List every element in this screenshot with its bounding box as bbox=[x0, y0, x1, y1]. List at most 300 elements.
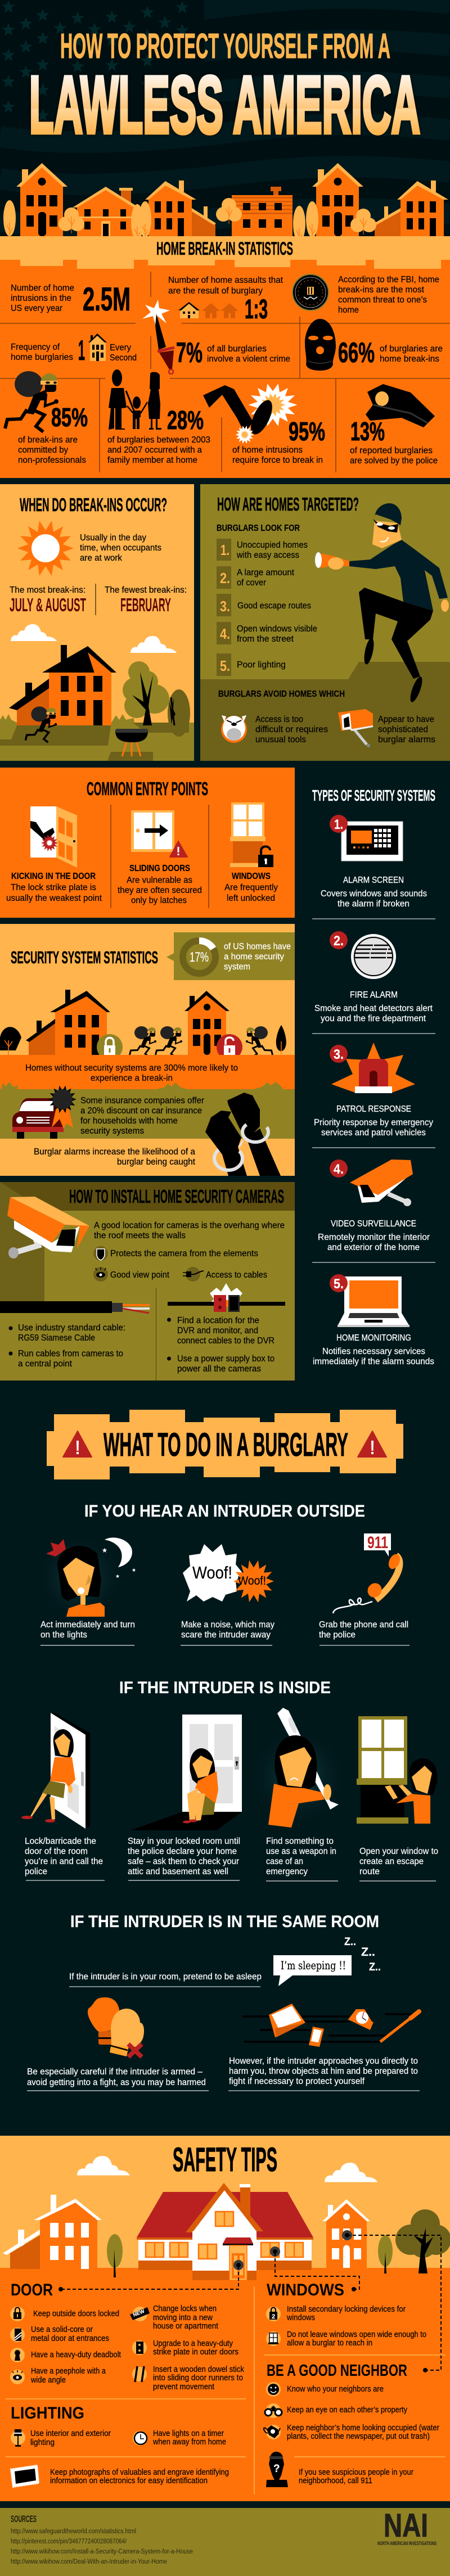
stat: force to break in bbox=[232, 417, 325, 465]
stat: home break-ins share: home break-ins bbox=[380, 354, 439, 364]
illustration: phone and 911 bubble: 911 bbox=[367, 1533, 388, 1552]
item: view point: Good view point bbox=[110, 1270, 170, 1280]
list: burglars look for: with easy access bbox=[236, 551, 299, 560]
list: burglars avoid homes: difficult or requires bbox=[255, 725, 328, 734]
band: homes without systems: experience a break-in bbox=[91, 1073, 173, 1083]
system 5: home monitoring: HOME MONITORING bbox=[336, 1333, 411, 1343]
illustration: woman holding bat bbox=[250, 1708, 346, 1828]
system 2: fire alarm: 2. bbox=[334, 933, 344, 949]
list: burglars look for: 4. bbox=[220, 625, 230, 642]
list: burglars look for: BURGLARS LOOK FOR bbox=[217, 524, 300, 533]
stat: non-professionals: non-professionals bbox=[18, 455, 86, 465]
list: burglars look for bbox=[217, 524, 317, 676]
stat: home break-ins share: of burglaries are bbox=[380, 344, 443, 354]
text: daytime bbox=[80, 533, 161, 563]
section: if you hear an intruder outside bbox=[38, 1502, 410, 1645]
system 4: video surveillance: 4. bbox=[334, 1162, 344, 1177]
system 2: fire alarm bbox=[314, 931, 433, 1023]
icon: binoculars bbox=[265, 2403, 282, 2418]
text: good location: the roof meets the walls bbox=[94, 1231, 186, 1240]
text: kicking in the door: KICKING IN THE DOOR bbox=[11, 872, 96, 881]
section: lighting tips: when away from home bbox=[152, 2438, 226, 2447]
system 1: alarm screen: 1. bbox=[334, 817, 343, 832]
list: left install steps: Use industry standard cable: bbox=[18, 1323, 125, 1333]
system 3: patrol response bbox=[314, 1043, 433, 1138]
text: find a weapon: emergency bbox=[266, 1867, 308, 1876]
icon: dowels bbox=[132, 2366, 147, 2382]
system 4: video surveillance: Remotely monitor the interior bbox=[318, 1233, 430, 1242]
text: throw objects: However, if the intruder approaches you directly to bbox=[229, 2056, 418, 2066]
panel: how to install home security cameras bbox=[0, 1182, 295, 1381]
text: lock or barricade: police bbox=[25, 1867, 47, 1876]
tip: photographs of valuables: Keep photographs of valuables and engrave identifying bbox=[50, 2468, 229, 2477]
heading band bbox=[0, 236, 450, 269]
text: sliding doors: only by latches bbox=[131, 896, 187, 905]
icon: smiley bbox=[266, 2382, 281, 2397]
illustration: woman turning on lights bbox=[38, 1535, 136, 1619]
stat: family member at home bbox=[107, 405, 210, 465]
sleeping zs: Z.. bbox=[361, 1946, 375, 1959]
illustration: row of orange houses bbox=[3, 163, 448, 252]
list: right install steps bbox=[167, 1316, 274, 1374]
system 3: patrol response: PATROL RESPONSE bbox=[336, 1104, 411, 1114]
source list bbox=[11, 2528, 193, 2565]
panel: when do break-ins occur bbox=[0, 484, 194, 761]
list: burglars avoid homes: unusual tools bbox=[255, 735, 306, 745]
section: windows tips: windows bbox=[286, 2313, 315, 2322]
text: lock or barricade: door of the room bbox=[25, 1847, 88, 1856]
text: lock or barricade: you’re in and call the bbox=[25, 1857, 103, 1866]
list: left install steps bbox=[9, 1323, 125, 1369]
stat: family member at home: and 2007 occurred with a bbox=[107, 445, 202, 455]
stat: home break-ins share: 66% bbox=[338, 337, 375, 368]
stat: solved by police: 13% bbox=[350, 417, 385, 446]
text: grab the phone: Grab the phone and call bbox=[319, 1620, 408, 1630]
section: door tips: into sliding door runners to bbox=[153, 2374, 243, 2383]
callout: 17 percent: 17% bbox=[190, 950, 209, 965]
stat: solved by police bbox=[350, 417, 438, 466]
illustration: large security camera bbox=[7, 1197, 89, 1258]
text: open window: route bbox=[359, 1867, 380, 1876]
heading: SECURITY SYSTEM STATISTICS bbox=[11, 948, 158, 967]
stat: home assaults ratio: Number of home assaults that bbox=[168, 276, 284, 285]
stat: non-professionals bbox=[18, 403, 88, 465]
illustration: woman sitting by door bbox=[130, 1715, 242, 1830]
system 4: video surveillance: and exterior of the home bbox=[327, 1243, 420, 1252]
stat: home intrusions per year bbox=[11, 281, 130, 318]
callout: 17 percent: a home security bbox=[224, 952, 284, 962]
stat: frequency of burglaries: home burglaries bbox=[11, 353, 73, 362]
clouds bbox=[77, 2156, 377, 2182]
list: right install steps: connect cables to the DVR bbox=[177, 1336, 274, 1346]
illustration: woman barricading door bbox=[21, 1713, 90, 1829]
callout: 17 percent: system bbox=[224, 962, 250, 972]
stat: home intrusions per year: intrusions in the bbox=[11, 294, 71, 303]
stat: non-professionals: 85% bbox=[51, 403, 88, 432]
source list: http://www.wikihow.com/Install-a-Security-Camera-System-for-a-House bbox=[11, 2548, 193, 2555]
list: right install steps: Find a location for the bbox=[177, 1316, 259, 1325]
logo: north american investigations: NAI bbox=[384, 2507, 428, 2544]
text: throw objects: harm you, throw objects at him and be prepared to bbox=[229, 2067, 418, 2076]
item: cables bbox=[183, 1267, 267, 1282]
stat: home assaults ratio bbox=[168, 276, 284, 324]
stat: frequency of burglaries bbox=[11, 333, 137, 366]
system 4: video surveillance bbox=[318, 1160, 430, 1252]
stat: family member at home: 28% bbox=[167, 405, 204, 435]
speech bubble bbox=[273, 1955, 352, 1986]
list: burglars avoid homes bbox=[218, 689, 435, 747]
icon: warning right bbox=[358, 1431, 386, 1457]
text: windows: WINDOWS bbox=[232, 872, 271, 881]
icon: lamp bbox=[11, 2429, 25, 2447]
system 5: home monitoring: 5. bbox=[334, 1276, 344, 1292]
icon: new tag: NEW bbox=[132, 2308, 146, 2318]
list: burglars look for: 5. bbox=[220, 657, 230, 674]
stat: non-professionals: committed by bbox=[18, 445, 68, 455]
text: peak and low months: The most break-ins: bbox=[10, 585, 86, 595]
stat: home break-ins share bbox=[338, 337, 443, 368]
text: stay in locked room: attic and basement as well bbox=[128, 1867, 228, 1876]
list: left install steps: a central point bbox=[18, 1359, 73, 1369]
panel: safety tips: SAFETY TIPS bbox=[173, 2141, 277, 2178]
tip: photographs of valuables: information on electronics for easy identification bbox=[50, 2476, 208, 2485]
icon: security camera bbox=[338, 709, 373, 747]
connector dashed lines bbox=[61, 2235, 441, 2370]
section: if the intruder is in the same room bbox=[27, 1912, 420, 2091]
text: careful if armed bbox=[27, 2067, 209, 2091]
section: door tips: moving into a new bbox=[153, 2313, 213, 2322]
section: be a good neighbor bbox=[264, 2362, 439, 2441]
text: stay in locked room: Stay in your locked room until bbox=[128, 1837, 240, 1846]
text: peak and low months: JULY & AUGUST bbox=[10, 594, 86, 615]
text: grab the phone: the police bbox=[319, 1630, 356, 1640]
panel: common entry points bbox=[0, 768, 295, 918]
section: door tips: Insert a wooden dowel stick bbox=[153, 2365, 245, 2374]
list: burglars look for: A large amount bbox=[237, 568, 295, 578]
illustration: main house with markers bbox=[137, 2183, 313, 2280]
speech bubble: I’m sleeping !! bbox=[281, 1959, 346, 1972]
icon: knife with flash bbox=[142, 300, 174, 374]
section: door tips: DOOR bbox=[11, 2281, 53, 2299]
section: lighting tips: Use interior and exterior bbox=[30, 2429, 111, 2438]
text: stay in locked room bbox=[128, 1837, 240, 1880]
panel: safety tips bbox=[0, 2136, 450, 2501]
stat: force to break in: require force to break in bbox=[232, 455, 323, 465]
text: act immediately: on the lights bbox=[40, 1630, 87, 1640]
text: stay in locked room: the police declare your home bbox=[128, 1847, 237, 1856]
illustration: woof speech bursts: Woof! bbox=[238, 1575, 266, 1587]
section: door tips: Have a heavy-duty deadbolt bbox=[31, 2351, 121, 2360]
illustration: siamese cable bbox=[0, 1301, 150, 1313]
illustration: woman opening window bbox=[357, 1716, 438, 1824]
icon: small window bbox=[266, 2331, 281, 2346]
section: door tips: Upgrade to a heavy-duty bbox=[153, 2339, 233, 2348]
text: daytime: Usually in the day bbox=[80, 533, 146, 543]
stat: violent crime: 7% bbox=[176, 337, 202, 368]
text: careful if armed: Be especially careful if the intruder is armed – bbox=[27, 2067, 202, 2077]
text: open window bbox=[359, 1847, 438, 1881]
illustration: right neighbouring house and trees bbox=[322, 2199, 450, 2273]
section: door tips: strike plate in outer doors bbox=[153, 2348, 238, 2357]
text: find a weapon: Find something to bbox=[266, 1837, 334, 1846]
section: be a good neighbor: Know who your neighbors are bbox=[287, 2385, 384, 2394]
text: lock or barricade: Lock/barricade the bbox=[25, 1837, 96, 1846]
text: find a weapon: case of an bbox=[266, 1857, 303, 1866]
text: peak and low months: FEBRUARY bbox=[120, 594, 171, 615]
heading: WHEN DO BREAK-INS OCCUR? bbox=[20, 494, 167, 515]
header flag background bbox=[0, 0, 450, 236]
source list: http://www.wikihow.com/Deal-With-an-Intruder-in-Your-Home bbox=[11, 2559, 167, 2565]
panel: types of security systems bbox=[312, 787, 435, 1366]
section: lighting tips: LIGHTING bbox=[11, 2404, 84, 2422]
text: windows bbox=[224, 872, 278, 903]
text: daytime: are at work bbox=[80, 553, 122, 563]
stat: FBI seal and text: home bbox=[338, 305, 359, 315]
system 1: alarm screen: ALARM SCREEN bbox=[343, 876, 404, 885]
stat: home assaults ratio: 1:3 bbox=[245, 295, 268, 324]
icon: warning left bbox=[63, 1431, 92, 1457]
list: left install steps: RG59 Siamese Cable bbox=[18, 1333, 95, 1343]
list: burglars look for: 1. bbox=[220, 542, 230, 558]
text: sliding doors: they are often secured bbox=[118, 886, 202, 895]
text: careful if armed: avoid getting into a fight, as you may be harmed bbox=[27, 2078, 206, 2087]
list: burglars avoid homes: burglar alarms bbox=[378, 735, 435, 745]
section: door tips: house or apartment bbox=[153, 2322, 218, 2331]
icon: kicked door bbox=[30, 806, 77, 868]
band: alarms and burglars caught: Burglar alarms increase the likelihood of a bbox=[34, 1147, 195, 1157]
section: if the intruder is inside bbox=[21, 1679, 438, 1881]
icon: strike plate bbox=[132, 2340, 147, 2355]
section: windows tips: WINDOWS bbox=[267, 2281, 344, 2299]
icon: peephole bbox=[10, 2370, 25, 2384]
text: sliding doors: SLIDING DOORS bbox=[129, 864, 190, 873]
callout: 17 percent: of US homes have bbox=[224, 942, 291, 951]
section: door tips: metal door at entrances bbox=[31, 2334, 109, 2343]
icon: watering can bbox=[264, 2425, 281, 2439]
item: shield bbox=[93, 1246, 258, 1261]
heading band: HOME BREAK-IN STATISTICS bbox=[156, 238, 293, 259]
band: insurance discount: security systems bbox=[80, 1126, 144, 1136]
text: make a noise bbox=[181, 1620, 274, 1645]
illustration: thrown objects bbox=[242, 2004, 419, 2047]
system 3: patrol response: services and patrol vehicles bbox=[321, 1128, 426, 1138]
heading: SOURCES bbox=[11, 2514, 37, 2524]
stat: violent crime: of all burglaries bbox=[207, 344, 267, 354]
section: door tips: Keep outside doors locked bbox=[33, 2309, 119, 2318]
illustration: woof speech bursts bbox=[183, 1544, 274, 1602]
list: burglars look for: from the street bbox=[237, 634, 294, 644]
icon: sliding door with warning bbox=[131, 810, 187, 857]
section: windows tips bbox=[266, 2281, 426, 2348]
list: burglars avoid homes: BURGLARS AVOID HOMES WHICH bbox=[218, 689, 345, 699]
band: insurance discount: for households with home bbox=[80, 1116, 178, 1126]
illustration: burglar with flashlight bbox=[315, 503, 449, 703]
text: peak and low months: The fewest break-ins: bbox=[105, 585, 187, 595]
system 5: home monitoring: immediately if the alarm sounds bbox=[313, 1357, 434, 1366]
text: windows: left unlocked bbox=[227, 894, 275, 903]
section: windows tips: allow a burglar to reach in bbox=[287, 2339, 372, 2348]
stat: FBI seal and text: common threat to one’s bbox=[338, 295, 427, 305]
stat: home assaults ratio: are the result of burglary bbox=[168, 286, 263, 296]
stat: FBI seal and text: According to the FBI, home bbox=[338, 275, 439, 285]
system 3: patrol response: 3. bbox=[334, 1047, 344, 1062]
stat: solved by police: are solved by the police bbox=[350, 456, 438, 466]
sleeping zs bbox=[344, 1936, 381, 1973]
tip: suspicious people: neighborhood, call 911 bbox=[299, 2476, 372, 2485]
system 2: fire alarm: FIRE ALARM bbox=[350, 990, 398, 1000]
stat: family member at home: family member at home bbox=[107, 455, 197, 465]
icon: clock bbox=[133, 2431, 147, 2446]
stat: FBI seal and text: break-ins are the most bbox=[338, 285, 425, 295]
callout: 17 percent bbox=[166, 932, 295, 980]
icon: police hat bbox=[366, 384, 435, 427]
text: grab the phone bbox=[319, 1620, 410, 1645]
stat: home intrusions per year: 2.5M bbox=[83, 281, 130, 318]
list: burglars avoid homes: sophisticated bbox=[378, 725, 428, 734]
text: open window: Open your window to bbox=[359, 1847, 438, 1856]
icon: unlocked badge bbox=[217, 1034, 242, 1060]
text: make a noise: scare the intruder away bbox=[181, 1630, 271, 1640]
text: make a noise: Make a noise, which may bbox=[181, 1620, 274, 1630]
text: lock or barricade bbox=[25, 1837, 105, 1880]
list: burglars look for: of cover bbox=[237, 578, 266, 588]
list: burglars look for: 3. bbox=[220, 598, 230, 615]
list: burglars avoid homes: Access is too bbox=[255, 715, 303, 724]
text: act immediately bbox=[40, 1620, 135, 1645]
sleeping zs: Z.. bbox=[344, 1936, 356, 1948]
system 1: alarm screen bbox=[321, 815, 427, 909]
panel: how are homes targeted bbox=[200, 484, 450, 761]
section: door tips: Change locks when bbox=[153, 2304, 217, 2313]
band: insurance discount bbox=[0, 1082, 295, 1139]
icon: boxing gloves bbox=[88, 1997, 144, 2057]
system 3: patrol response: Priority response by emergency bbox=[314, 1118, 433, 1127]
section: door tips: wide angle bbox=[30, 2376, 66, 2385]
icon: suspicious person: ? bbox=[273, 2463, 280, 2475]
illustration: woof speech bursts: Woof! bbox=[192, 1563, 232, 1582]
system 5: home monitoring bbox=[313, 1274, 434, 1366]
section: windows tips: Do not leave windows open wide enough to bbox=[287, 2330, 426, 2339]
section: windows tips: Install secondary locking devices for bbox=[287, 2305, 406, 2314]
text: kicking in the door bbox=[6, 872, 102, 903]
list: right install steps: Use a power supply box to bbox=[177, 1354, 274, 1364]
stat: frequency of burglaries: Every bbox=[110, 343, 131, 353]
item: view point bbox=[93, 1267, 170, 1282]
list: burglars look for: Open windows visible bbox=[237, 624, 317, 634]
tip: suspicious people: If you see suspicious people in your bbox=[299, 2468, 413, 2477]
panel: home break-in statistics bbox=[0, 236, 450, 478]
stat: FBI seal and text bbox=[292, 274, 439, 315]
stat: frequency of burglaries: 1 bbox=[78, 335, 85, 366]
stat: home intrusions per year: Number of home bbox=[11, 283, 74, 293]
text: sliding doors bbox=[118, 864, 202, 905]
text: good location bbox=[94, 1221, 285, 1240]
illustration: handcuffed hands bbox=[205, 1093, 281, 1176]
icon: balaclava mask bbox=[305, 319, 336, 371]
illustration: phone and 911 bubble bbox=[333, 1533, 402, 1613]
stat: home intrusions per year: US every year bbox=[11, 304, 62, 313]
icon: car with ribbon bbox=[12, 1085, 76, 1139]
band: insurance discount: Some insurance companies offer bbox=[80, 1096, 204, 1106]
stat: frequency of burglaries: Frequency of bbox=[11, 342, 60, 352]
system 1: alarm screen: Covers windows and sounds bbox=[321, 889, 427, 899]
stat: violent crime: involve a violent crime bbox=[207, 354, 290, 364]
section: door tips: prevent movement bbox=[153, 2383, 214, 2392]
icon: double lock: 2 bbox=[272, 2313, 275, 2320]
list: right install steps: DVR and monitor, and bbox=[177, 1326, 258, 1336]
illustration: house with burglar bbox=[0, 624, 194, 761]
list: burglars look for: Poor lighting bbox=[237, 660, 286, 670]
section: lighting tips: Have lights on a timer bbox=[153, 2429, 224, 2438]
system 5: home monitoring: Notifies necessary services bbox=[322, 1347, 425, 1356]
heading: IF THE INTRUDER IS IN THE SAME ROOM bbox=[70, 1912, 379, 1931]
source list: http://www.safeguardtheworld.com/statistics.html bbox=[11, 2528, 136, 2535]
stat: force to break in: of home intrusions bbox=[232, 445, 303, 455]
icon: padlock bbox=[10, 2307, 25, 2321]
stat: non-professionals: of break-ins are bbox=[18, 435, 78, 445]
illustration: left neighbouring house bbox=[3, 2195, 123, 2277]
icon: new tag bbox=[130, 2307, 150, 2321]
icon: burglar with sack bbox=[5, 371, 58, 432]
banner: what to do in a burglary bbox=[47, 1410, 403, 1479]
text: peak and low months bbox=[10, 584, 187, 615]
section: be a good neighbor: Keep an eye on each other’s property bbox=[287, 2406, 408, 2415]
tip: photographs of valuables bbox=[11, 2465, 229, 2487]
text: good location: A good location for cameras is the overhang where bbox=[94, 1221, 285, 1230]
source list: http://pinterest.com/pin/346777240028087064/ bbox=[11, 2538, 127, 2545]
text: find a weapon: use as a weapon in bbox=[266, 1847, 336, 1856]
section: door tips: Have a peephole with a bbox=[31, 2367, 106, 2376]
section: lighting tips bbox=[11, 2404, 226, 2447]
heading: IF YOU HEAR AN INTRUDER OUTSIDE bbox=[84, 1502, 365, 1521]
list: burglars avoid homes: Appear to have bbox=[378, 715, 434, 724]
system 1: alarm screen: the alarm if broken bbox=[338, 899, 410, 909]
stat: violent crime bbox=[176, 337, 290, 368]
text: kicking in the door: usually the weakest point bbox=[6, 894, 102, 903]
system 4: video surveillance: VIDEO SURVEILLANCE bbox=[331, 1219, 416, 1229]
band: insurance discount: a 20% discount on car insurance bbox=[80, 1106, 202, 1116]
stat: solved by police: of reported burglaries bbox=[350, 446, 433, 455]
text: windows: Are frequently bbox=[224, 883, 278, 892]
icon: locked badge bbox=[97, 1034, 123, 1060]
icon: suspicious person bbox=[266, 2452, 288, 2487]
icon: boot kicking with explosion bbox=[203, 384, 297, 444]
section: door tips bbox=[10, 2281, 245, 2392]
section: lighting tips: lighting bbox=[30, 2438, 55, 2447]
list: burglars look for: 2. bbox=[220, 570, 230, 587]
text: act immediately: Act immediately and turn bbox=[40, 1620, 135, 1630]
band: alarms and burglars caught bbox=[0, 1139, 295, 1176]
heading: COMMON ENTRY POINTS bbox=[87, 778, 208, 799]
text: sliding doors: Are vulnerable as bbox=[127, 876, 192, 885]
text: stay in locked room: safe – ask them to check your bbox=[128, 1857, 239, 1866]
heading: IF THE INTRUDER IS INSIDE bbox=[119, 1679, 331, 1697]
text: find a weapon bbox=[266, 1837, 338, 1881]
panel: sources footer bbox=[0, 2507, 450, 2576]
text: pretend asleep: If the intruder is in your room, pretend to be asleep bbox=[69, 1972, 262, 1982]
band: homes without systems bbox=[0, 1055, 295, 1089]
band: homes without systems: Homes without security systems are 300% more likely to bbox=[25, 1063, 238, 1073]
stat: frequency of burglaries: Second bbox=[110, 353, 137, 363]
tip: suspicious people bbox=[266, 2452, 413, 2487]
system 2: fire alarm: Smoke and heat detectors alert bbox=[314, 1004, 433, 1013]
text: daytime: time, when occupants bbox=[80, 543, 161, 553]
section: be a good neighbor: BE A GOOD NEIGHBOR bbox=[267, 2362, 407, 2380]
stat: family member at home: of burglaries between 2003 bbox=[107, 435, 210, 445]
icon: keyhole bbox=[10, 2348, 25, 2362]
list: right install steps: power all the cameras bbox=[177, 1364, 261, 1374]
item: cables: Access to cables bbox=[206, 1270, 267, 1280]
